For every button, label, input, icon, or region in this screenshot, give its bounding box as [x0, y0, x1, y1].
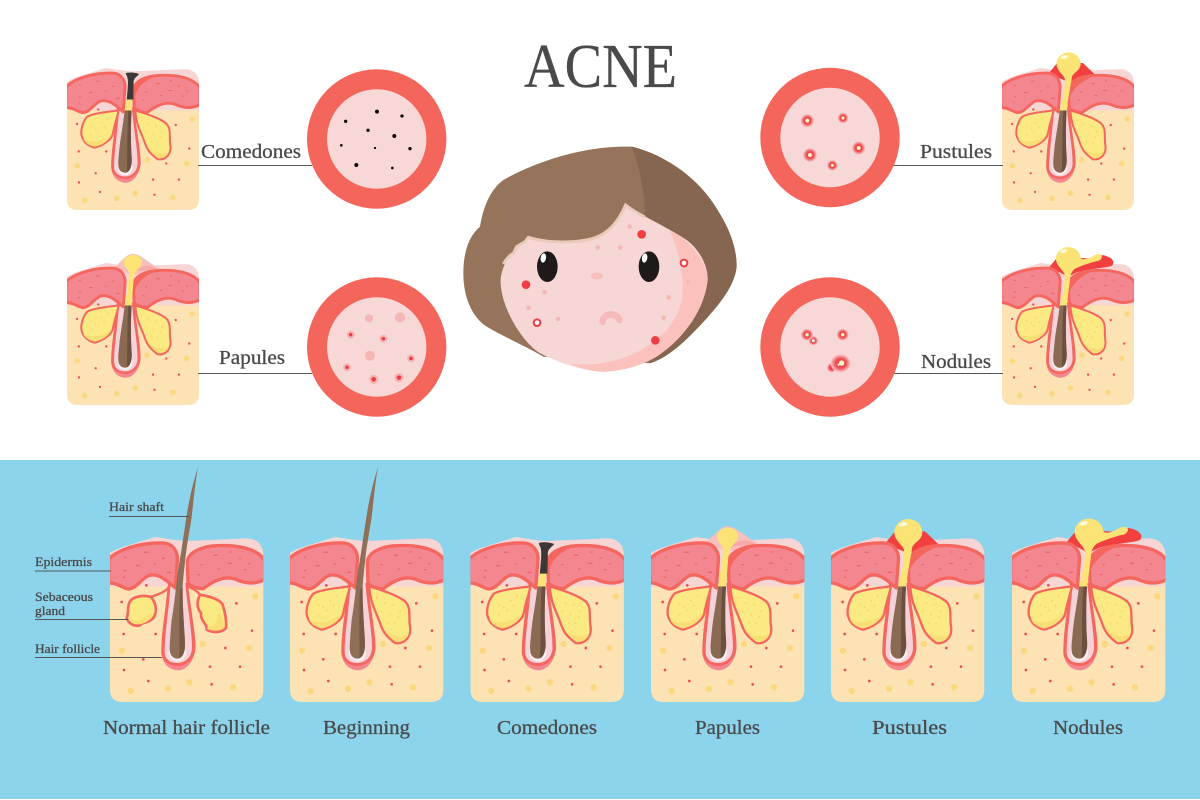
panel: comedones skin circle: [307, 69, 446, 209]
annotation: epidermis: Epidermis: [35, 555, 92, 569]
annotation: hair shaft: [109, 500, 189, 516]
stage: normal hair follicle: [109, 467, 265, 702]
caption: normal hair follicle: Normal hair follicle: [103, 718, 270, 739]
title: ACNE: [524, 33, 677, 101]
connector: pustules: [892, 164, 1003, 166]
annotation: hair follicle: Hair follicle: [35, 642, 100, 656]
bottom blue band: [0, 460, 1200, 799]
annotation: sebaceous gland: gland: [35, 604, 66, 618]
panel: papules skin circle: [307, 277, 446, 417]
stage: comedones: [469, 537, 625, 702]
stage: nodules: [1011, 519, 1167, 702]
label: pustules: Pustules: [920, 141, 992, 163]
annotation: hair shaft: Hair shaft: [109, 500, 165, 514]
caption: pustules: Pustules: [872, 718, 947, 739]
icon: girl's face with acne: [463, 147, 737, 372]
stage: pustules: [830, 519, 986, 702]
annotation: sebaceous gland: Sebaceous: [35, 590, 93, 604]
label: comedones: Comedones: [201, 141, 301, 163]
connector: comedones: [198, 164, 312, 166]
icon: skin section, comedones: [66, 68, 200, 210]
connector: papules: [198, 372, 312, 374]
panel: nodules skin circle: [760, 277, 900, 417]
icon: skin section, nodules: [1001, 247, 1135, 405]
label: nodules: Nodules: [921, 351, 991, 373]
icon: skin section, pustules: [1001, 52, 1135, 210]
icon: skin section, papules: [66, 254, 200, 405]
caption: beginning: Beginning: [323, 718, 410, 739]
caption: nodules: Nodules: [1053, 718, 1123, 739]
stage: beginning: [289, 467, 445, 702]
label: papules: Papules: [219, 347, 285, 369]
annotation: hair follicle: [35, 642, 162, 658]
connector: nodules: [892, 372, 1003, 374]
stage: papules: [650, 526, 806, 702]
caption: papules: Papules: [695, 718, 760, 739]
annotation: sebaceous gland: [35, 590, 128, 620]
annotation: epidermis: [35, 555, 111, 571]
panel: pustules skin circle: [760, 68, 900, 207]
caption: comedones: Comedones: [497, 718, 597, 739]
